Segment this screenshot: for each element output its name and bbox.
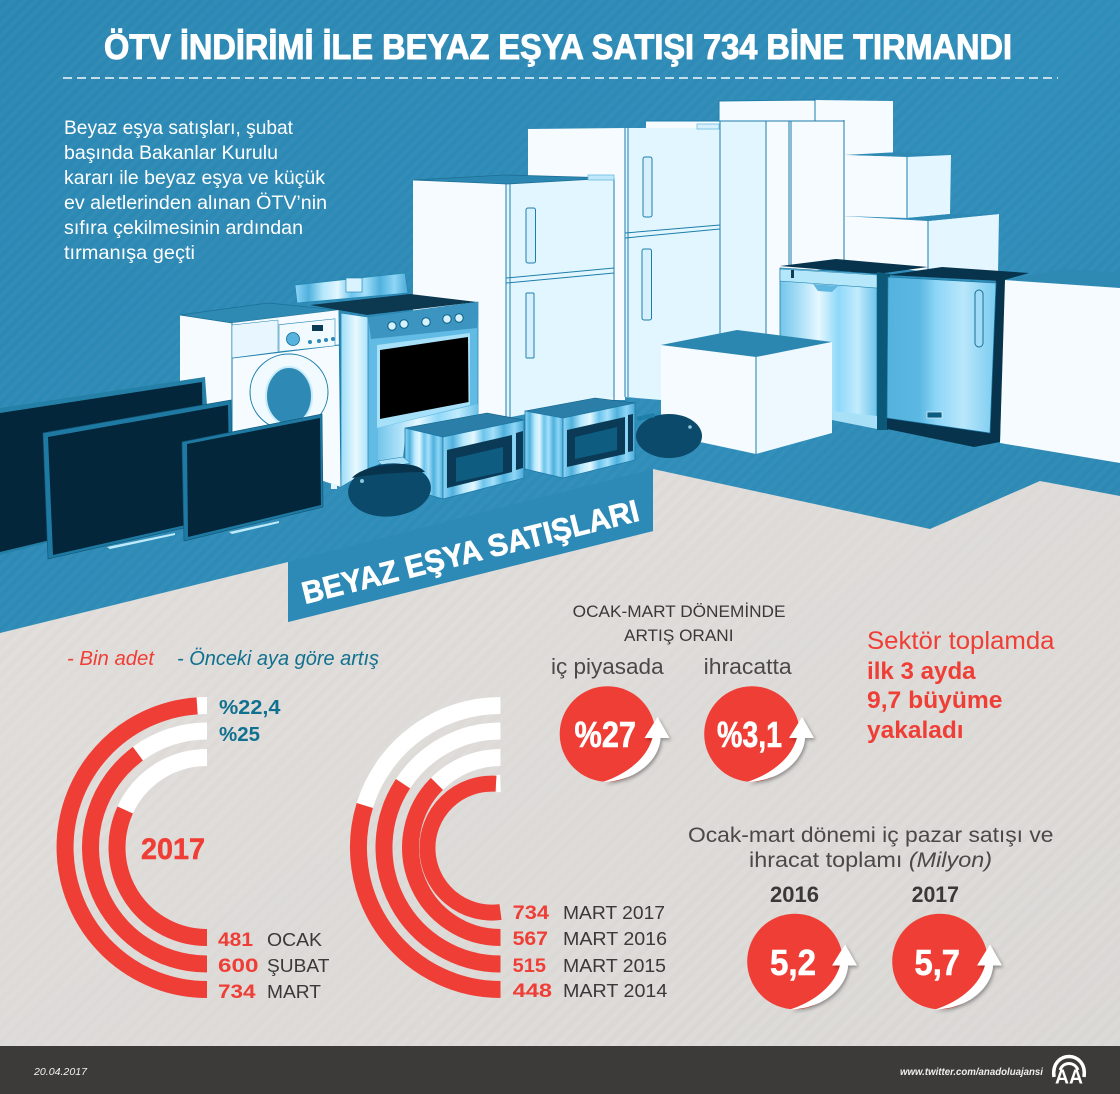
monthly labels: ŞUBAT — [267, 955, 329, 976]
intro text block: başında Bakanlar Kurulu — [64, 142, 278, 164]
badge: ihracatta %3,1 — [704, 686, 814, 782]
badge: 2016 5,2 — [747, 914, 857, 1010]
sub-labels — [551, 654, 792, 679]
icon: tv large — [0, 377, 207, 555]
intro text block — [64, 117, 327, 264]
footer bar: 20.04.2017 — [33, 1066, 88, 1078]
monthly labels: 734 — [218, 981, 256, 1003]
icon: AA logo — [1054, 1056, 1084, 1088]
banner: beyaz eşya satışları: BEYAZ EŞYA SATIŞLARI — [298, 493, 642, 611]
badge: iç piyasada %27 — [560, 686, 670, 782]
icon: rear fridge — [528, 121, 720, 400]
callout: sector growth: 9,7 büyüme — [867, 687, 1002, 714]
icon: left round speaker — [346, 457, 433, 520]
legend — [67, 648, 379, 670]
icon: AA logo: AA — [1055, 1066, 1083, 1088]
white goods illustration — [0, 100, 1120, 559]
heading: increase rate — [573, 602, 786, 645]
badge: 2017 5,7 — [892, 914, 1002, 1010]
march labels: MART 2016 — [563, 928, 667, 949]
march labels: 515 — [513, 955, 546, 977]
icon: right round speaker — [636, 413, 702, 458]
year labels — [770, 882, 959, 907]
badge: ihracatta %3,1: %3,1 — [717, 714, 782, 755]
march labels: 567 — [513, 928, 548, 950]
march labels: MART 2015 — [563, 955, 666, 976]
march labels — [513, 902, 667, 1002]
footer bar: www.twitter.com/anadoluajansi — [900, 1066, 1044, 1078]
intro text block: Beyaz eşya satışları, şubat — [64, 117, 294, 139]
title: ÖTV İNDİRİMİ İLE BEYAZ EŞYA SATIŞI 734 BİNE TIRMANDI — [104, 28, 1012, 67]
beige floor panel — [0, 469, 1120, 1046]
intro text block: tırmanışa geçti — [64, 242, 195, 264]
legend: - Önceki aya göre artış — [177, 648, 379, 670]
callout: sector growth — [867, 627, 1055, 744]
icon: stainless fridge — [887, 267, 1029, 447]
intro text block: sıfıra çekilmesinin ardından — [64, 217, 303, 239]
percent labels: %22,4 — [219, 697, 281, 719]
percent labels — [219, 697, 281, 746]
year labels: 2017 — [912, 882, 959, 907]
heading: total sales: Ocak-mart dönemi iç pazar satışı ve — [688, 823, 1054, 847]
heading: increase rate: OCAK-MART DÖNEMİNDE — [573, 602, 786, 621]
icon: microwave left — [405, 413, 524, 499]
monthly labels — [218, 929, 329, 1003]
icon: side by side fridge — [646, 120, 844, 340]
icon: washing machine — [180, 303, 341, 489]
callout: sector growth: Sektör toplamda — [867, 627, 1055, 655]
monthly labels: 600 — [218, 955, 259, 977]
intro text block: ev aletlerinden alınan ÖTV’nin — [64, 192, 327, 214]
year labels: 2016 — [770, 882, 819, 907]
intro text block: kararı ile beyaz eşya ve küçük — [64, 167, 325, 189]
icon: tv small — [182, 414, 323, 541]
heading: total sales: ihracat toplamı (Milyon) — [749, 848, 992, 872]
heading: total sales — [688, 823, 1054, 872]
icon: front fridge — [413, 175, 614, 420]
monthly labels: 481 — [218, 929, 253, 951]
badge: iç piyasada %27: %27 — [574, 714, 636, 755]
label: 2017: 2017 — [141, 833, 205, 866]
march labels: MART 2017 — [563, 902, 665, 923]
icon: right white box — [1000, 269, 1120, 463]
chart: 2017 monthly rings — [65, 706, 207, 990]
icon: front white box — [661, 330, 832, 454]
icon: dishwasher — [780, 259, 928, 430]
sub-labels: ihracatta — [704, 654, 792, 679]
march labels: 734 — [513, 902, 549, 924]
percent labels: %25 — [219, 724, 260, 746]
heading: increase rate: ARTIŞ ORANI — [624, 627, 734, 645]
badge: 2016 5,2: 5,2 — [770, 942, 816, 983]
chart: march comparison rings — [358, 706, 500, 990]
sub-labels: iç piyasada — [551, 654, 664, 679]
icon: oven — [295, 273, 478, 487]
icon: tv medium — [43, 400, 232, 559]
icon: microwave right — [525, 398, 635, 478]
march labels: 448 — [513, 980, 552, 1002]
icon: stacked boxes right — [843, 152, 999, 274]
footer bar — [0, 1046, 1120, 1094]
monthly labels: MART — [267, 981, 321, 1002]
monthly labels: OCAK — [267, 929, 323, 950]
badge: 2017 5,7: 5,7 — [914, 942, 960, 983]
legend: - Bin adet — [67, 648, 155, 670]
callout: sector growth: ilk 3 ayda — [867, 658, 976, 685]
icon: top back box — [719, 100, 893, 160]
callout: sector growth: yakaladı — [867, 717, 964, 744]
march labels: MART 2014 — [563, 980, 667, 1001]
